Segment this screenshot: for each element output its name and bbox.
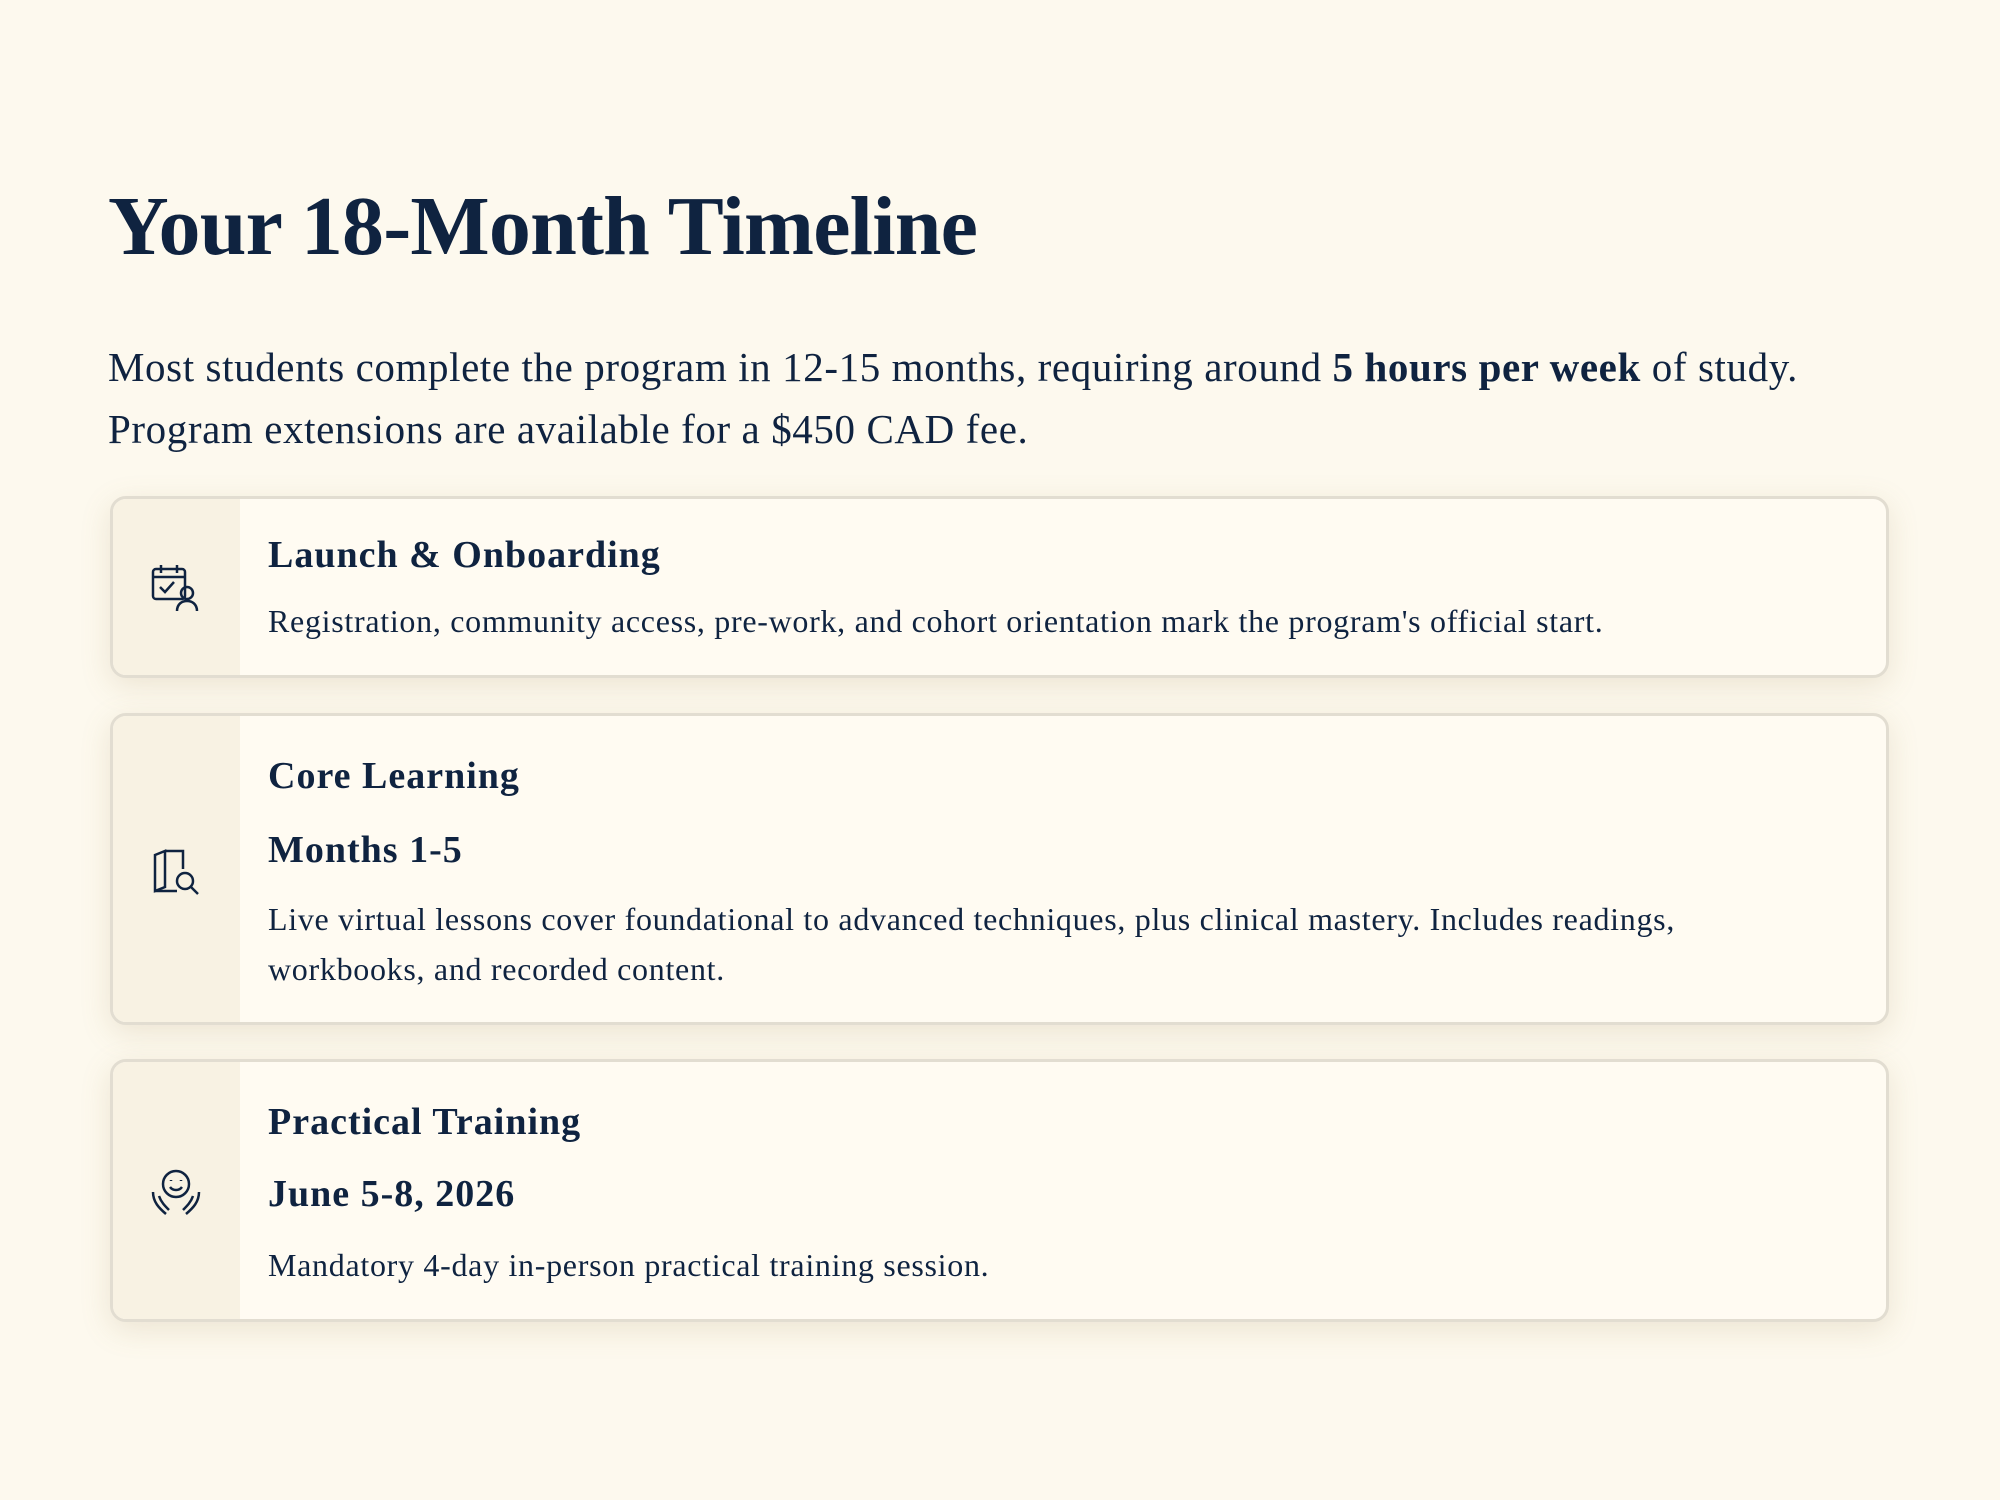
card: core learning [110,713,1889,1025]
intro paragraph: Most students complete the program in 12-15 months, requiring around 5 hours per week of study. [108,344,1798,390]
description: workbooks, and recorded content. [268,951,725,987]
subheading: June 5-8, 2026 [268,1173,515,1215]
card: launch & onboarding [110,496,1889,678]
description: Live virtual lessons cover foundational to advanced techniques, plus clinical mastery. Includes readings, [268,901,1675,937]
description: Registration, community access, pre-work, and cohort orientation mark the program's official start. [268,603,1603,639]
icon: hands smile [152,1170,200,1215]
icon: book search [154,849,199,895]
intro paragraph [108,344,1798,452]
intro paragraph: Program extensions are available for a $450 CAD fee. [108,406,1028,452]
heading: Practical Training [268,1101,581,1143]
description [268,901,1675,987]
subheading: Months 1-5 [268,829,463,871]
heading: Core Learning [268,755,520,797]
title: Your 18-Month Timeline [108,180,977,273]
heading: Launch & Onboarding [268,534,661,576]
icon: calendar person [152,565,198,611]
card: practical training [110,1059,1889,1322]
description: Mandatory 4-day in-person practical training session. [268,1247,989,1283]
